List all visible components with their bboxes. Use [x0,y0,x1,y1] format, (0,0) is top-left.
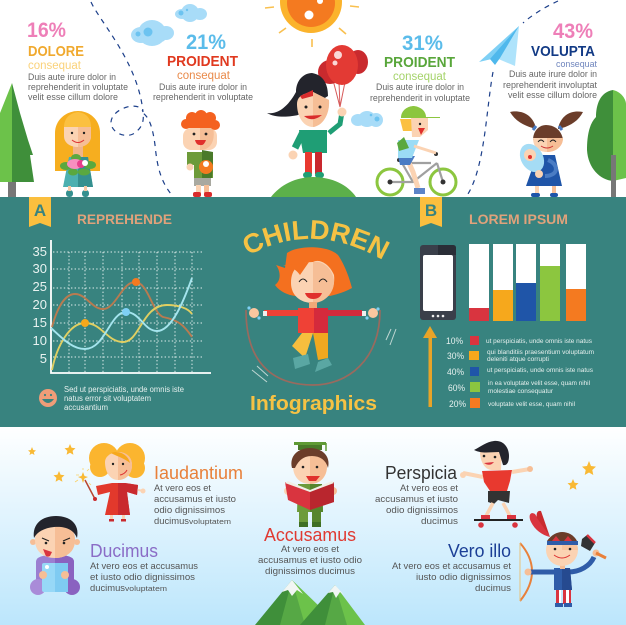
icon: left tree [0,83,34,197]
icon: clouds [131,4,383,127]
bar chart [469,244,586,321]
ribbon A: A [34,201,46,220]
legend: in ea voluptate velit esse, quam nihil [488,380,591,387]
legend: molestiae consequatur [488,388,554,395]
text: iaudantium: voluptatem [189,517,231,526]
icon: girl with balloons [267,45,368,178]
icon: boy with ball [181,110,220,197]
icon: archer boy [520,511,606,607]
text: iaudantium: odio dignissimos [154,505,225,516]
line chart: 30 [33,261,47,276]
block: 21% proident [153,31,253,102]
icon: boy with tablet [30,516,80,595]
icon: mountains [255,580,365,625]
icon: green hill [271,177,356,197]
block: 16% dolore: consequat [28,60,82,72]
text: ducimus: et iusto odio dignissimos [90,572,195,583]
section B [28,197,606,625]
legend: deleniti atque corrupti [487,356,549,363]
dashed path right [466,1,558,197]
line chart: 5 [40,351,47,366]
text: iaudantium: accusamus et iusto [154,494,236,505]
legend [446,336,594,410]
text: perspicia: accusamus et iusto [375,494,458,505]
text: iaudantium: ducimus [154,516,189,527]
icon: paper plane [479,26,519,66]
icon: wand girl [75,443,146,522]
block: 31% proident: reprehenderit in voluptate [370,93,470,103]
dashed path left [91,2,171,194]
block: 43% volupta: reprehenderit involuptat [503,80,597,90]
legend: voluptate velit esse, quam nihil [488,401,576,408]
text: perspicia: At vero eos et [400,483,458,494]
legend: 60% [448,383,465,394]
block: 31% proident [370,32,470,103]
block: 21% proident: consequat [177,70,231,82]
legend: 10% [446,336,463,347]
line chart: 10 [33,333,47,348]
text: accusamus: Accusamus [264,525,356,545]
text: iaudantium: Iaudantium [154,463,243,483]
text: ducimus [90,541,198,594]
legend: 40% [447,367,464,378]
icon: boy on bicycle [377,106,456,195]
ribbon B: B [425,201,437,220]
text: perspicia [375,463,458,527]
ribbon A [29,197,51,227]
icon: girl with baby [510,111,583,197]
line chart: 20 [33,297,47,312]
legend: 30% [447,351,464,362]
block: 16% dolore: velit esse cillum dolore [28,92,118,102]
block: 43% volupta: 43% [553,20,593,43]
text: vero illo: Vero illo [448,541,511,561]
icon: smiley [39,389,57,407]
icon: boy with book [284,442,337,527]
text: vero illo: iusto odio dignissimos [416,572,511,583]
block: 43% volupta: consequat [556,59,597,70]
bottom background [0,426,626,625]
text: perspicia: Perspicia [385,463,458,483]
subtitle: infographics: Infographics [250,393,377,415]
line chart: 15 [33,315,47,330]
text: vero illo [392,541,511,594]
caption [64,385,185,412]
block: 43% volupta: VOLUPTA [531,43,595,60]
caption: Sed ut perspiciatis, unde omnis iste [64,385,185,394]
block: 16% dolore: Duis aute irure dolor in [28,72,116,82]
legend: 20% [449,399,466,410]
caption: natus error sit voluptatem [64,394,151,403]
text: ducimus: At vero eos et accusamus [90,561,198,572]
arrow [423,326,437,407]
block: 21% proident: 21% [186,31,226,54]
block: 21% proident: PROIDENT [167,53,238,70]
ribbon B [420,197,442,227]
text: iaudantium [154,463,243,527]
block: 16% dolore: reprehenderit in voluptate [28,82,128,92]
block: 31% proident: consequat [393,71,447,83]
caption: accusantium [64,403,108,412]
text: accusamus: accusamus et iusto odio [258,555,362,566]
block: 43% volupta: velit esse cillum dolore [508,90,597,100]
title: children: CHILDREN [244,220,390,260]
text: vero illo: At vero eos et accusamus et [392,561,511,572]
icon: right tree [587,90,626,197]
block: 21% proident: reprehenderit in voluptate [153,92,253,102]
text: accusamus [258,525,362,577]
block: 16% dolore: DOLORE [28,43,84,60]
icon: girl with flowers [55,111,100,197]
block: 43% volupta [503,20,597,100]
legend: qui blanditiis praesentium voluptatum [487,349,594,356]
block: 16% dolore [27,19,128,102]
text: ducimus: ducimus [90,583,125,594]
text: ducimus: Ducimus [90,541,158,561]
heading: lorem ipsum: LOREM IPSUM [469,211,568,227]
text: accusamus: At vero eos et [281,544,339,555]
icon: skateboard boy [460,441,533,528]
icon: phone [420,245,456,320]
text: perspicia: odio dignissimos [386,505,458,516]
line chart [33,240,211,373]
legend: ut perspiciatis, unde omnis iste natus [487,367,594,374]
text: iaudantium: At vero eos et [154,483,211,494]
icon: stars [28,444,596,490]
block: 31% proident: 31% [402,32,443,55]
text: ducimus: voluptatem [125,584,167,593]
icon: sun [265,0,359,47]
text: accusamus: dignissimos ducimus [265,566,355,577]
block: 16% dolore: 16% [27,19,66,42]
block: 21% proident: Duis aute irure dolor in [159,82,247,92]
text: vero illo: ducimus [475,583,511,594]
legend: ut perspiciatis, unde omnis iste natus [486,338,593,345]
block: 43% volupta: Duis aute irure dolor in [509,69,597,79]
heading: reprehende: REPREHENDE [77,211,172,227]
line chart: 25 [33,279,47,294]
icon: jump rope girl [246,247,396,385]
block: 31% proident: PROIDENT [384,54,455,71]
teal panel [0,197,626,427]
line chart: 35 [33,244,47,259]
section A [29,197,211,412]
block: 31% proident: Duis aute irure dolor in [376,82,464,92]
text: perspicia: ducimus [421,516,458,527]
